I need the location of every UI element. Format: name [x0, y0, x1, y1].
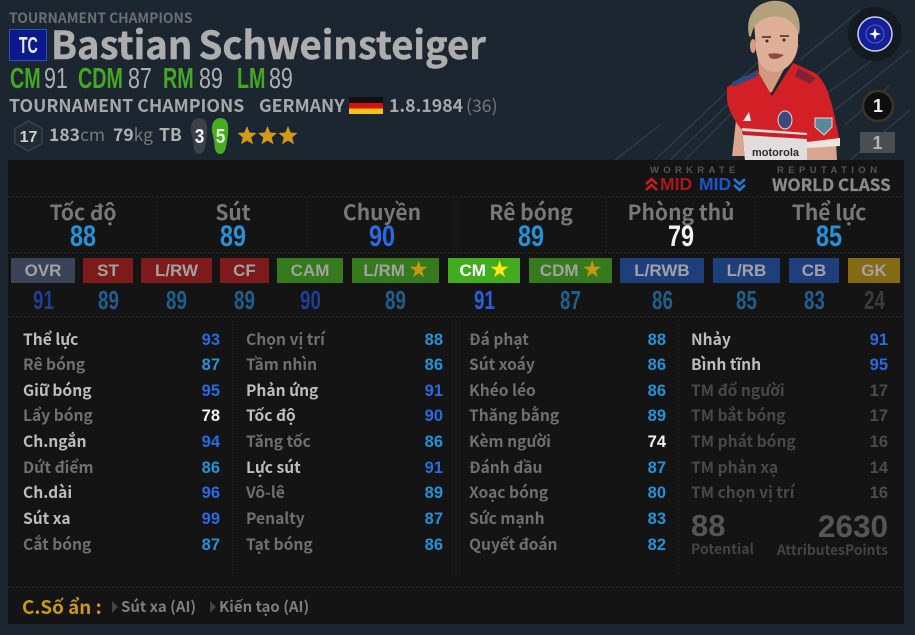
- main panel: [8, 160, 904, 624]
- attributes column 1: Sút xa: [23, 507, 71, 529]
- stat: Sút: 89: [220, 220, 246, 253]
- stat: Tốc độ: Tốc độ: [49, 197, 117, 227]
- position tabs: CAM: [291, 261, 329, 280]
- rank badge: 1: [873, 96, 883, 116]
- stat: Rê bóng: 89: [518, 220, 544, 253]
- position tabs: L/RWB: [634, 261, 690, 280]
- position tabs: L/RW: [155, 261, 198, 280]
- panel dividers: [8, 196, 902, 588]
- player name: Bastian Schweinsteiger: [51, 16, 486, 71]
- height: 183cm: [49, 122, 105, 147]
- stat: Phòng thủ: [627, 197, 734, 253]
- position tabs: 89: [98, 285, 118, 315]
- attributes column 3: Sút xoáy: [469, 353, 535, 375]
- attributes column 3: Đánh đầu: [469, 456, 542, 478]
- position tabs: 90: [300, 285, 320, 315]
- level badge: [860, 132, 895, 153]
- tournament logo: [848, 7, 902, 61]
- position tabs: L/RB: [727, 261, 766, 280]
- attributes column 1: 96: [202, 484, 220, 502]
- background diagonal stripes: [614, 10, 910, 160]
- position tabs: L/RM ★: [363, 259, 428, 281]
- attribute points: 2630: [818, 508, 888, 544]
- position tabs: 91: [33, 285, 53, 315]
- position tabs: 89: [234, 285, 255, 315]
- position tabs: CDM ★: [540, 259, 601, 281]
- workrate: MID: [699, 174, 731, 194]
- position tabs: ST: [97, 261, 119, 280]
- player info row: [14, 118, 298, 154]
- attribute points: [776, 508, 888, 559]
- main stats row: [49, 197, 866, 253]
- right arm: [798, 142, 837, 161]
- potential: [691, 508, 754, 559]
- icon: weak foot: [191, 118, 208, 154]
- left arm: [732, 120, 752, 160]
- attributes column 1: Cắt bóng: [23, 533, 91, 555]
- attributes column 2: Tầm nhìn: [246, 353, 317, 375]
- attributes column 2: Tăng tốc: [246, 430, 311, 452]
- adidas logo: [743, 112, 751, 121]
- body type: TB: [159, 122, 182, 147]
- attributes column 4: 17: [870, 407, 888, 425]
- position tabs: 86: [652, 285, 672, 315]
- attributes column 4: 91: [870, 331, 888, 349]
- icon: weak foot: 3: [195, 125, 204, 147]
- attributes column 1: 99: [202, 510, 220, 528]
- attributes column 2: Tốc độ: [246, 404, 296, 426]
- attributes column 4: Nhảy: [691, 328, 731, 350]
- attributes column 3: Xoạc bóng: [469, 481, 548, 503]
- MLS patch: [815, 118, 832, 135]
- subtitle: TOURNAMENT CHAMPIONS: [9, 7, 192, 27]
- attributes column 3: Kèm người: [469, 430, 551, 452]
- attributes column 3: 86: [648, 356, 666, 374]
- attributes column 2: 88: [425, 331, 443, 349]
- hidden traits: Sút xa (AI): [121, 596, 196, 617]
- badge: TC: [9, 29, 47, 61]
- position tabs: CB: [802, 261, 826, 280]
- position ratings: 89: [269, 63, 293, 95]
- icon: German flag: [349, 97, 383, 114]
- stat: Chuyền: Chuyền: [343, 197, 421, 227]
- attributes column 4: TM bắt bóng: [691, 404, 786, 426]
- position ratings: 87: [128, 63, 152, 95]
- attributes column 2: Tạt bóng: [246, 533, 313, 555]
- sponsor: motorola: [752, 147, 800, 159]
- attributes column 1: [23, 328, 220, 555]
- attributes column 3: Thăng bằng: [469, 404, 559, 426]
- icon: jersey number: 17: [20, 129, 38, 146]
- attributes column 3: 87: [648, 459, 666, 477]
- attributes column 3: 86: [648, 382, 666, 400]
- neck: [757, 50, 790, 96]
- position tabs: 85: [736, 285, 757, 315]
- attributes column 2: 86: [425, 356, 443, 374]
- position tabs: 89: [385, 285, 406, 315]
- attributes column 1: 86: [202, 459, 220, 477]
- attributes column 4: TM phát bóng: [691, 430, 796, 452]
- attributes column 1: Giữ bóng: [23, 379, 92, 401]
- position ratings: CM: [10, 63, 41, 95]
- attributes column 4: 16: [870, 433, 888, 451]
- shirt band: [742, 128, 807, 161]
- rank badge: [862, 90, 894, 122]
- position ratings: RM: [163, 63, 194, 95]
- badge: TC: TC: [18, 32, 38, 58]
- position tabs: 24: [864, 285, 884, 315]
- attributes column 4: Bình tĩnh: [691, 353, 761, 375]
- attributes column 1: 87: [202, 356, 220, 374]
- attributes column 4: TM chọn vị trí: [691, 481, 794, 503]
- stat: Sút: Sút: [215, 197, 251, 227]
- team and nationality line: TOURNAMENT CHAMPIONS: [9, 92, 244, 118]
- attributes column 3: 89: [648, 407, 666, 425]
- stat: Thể lực: Thể lực: [792, 197, 866, 227]
- position tabs: OVR: [25, 261, 61, 280]
- attributes column 1: 94: [202, 433, 220, 451]
- position tabs: 87: [560, 285, 581, 315]
- position tabs: 83: [804, 285, 824, 315]
- attributes column 4: [691, 328, 888, 503]
- position tabs: CM ★: [459, 259, 509, 281]
- icon: attack workrate chevrons: [645, 177, 658, 191]
- attributes column 2: [246, 328, 443, 555]
- hair: [748, 1, 800, 37]
- position ratings: CDM: [78, 63, 123, 95]
- position ratings: 89: [199, 63, 223, 95]
- potential: Potential: [691, 539, 754, 559]
- stat: Tốc độ: 88: [70, 220, 96, 253]
- icon: defence workrate chevrons: [733, 178, 746, 192]
- attributes column 2: 86: [425, 433, 443, 451]
- attributes column 1: 93: [202, 331, 220, 349]
- position ratings: [10, 63, 293, 95]
- position tabs: [11, 258, 900, 315]
- attributes column 3: [469, 328, 666, 555]
- stat: Phòng thủ: 79: [668, 220, 694, 253]
- attributes column 3: 80: [648, 484, 666, 502]
- attributes column 3: Đá phạt: [469, 328, 529, 350]
- stat: Thể lực: 85: [816, 220, 842, 253]
- attributes column 3: 83: [648, 510, 666, 528]
- attribute points: AttributesPoints: [777, 539, 888, 559]
- hidden traits: Kiến tạo (AI): [219, 596, 309, 617]
- attributes column 2: 91: [425, 382, 443, 400]
- player photo: [727, 0, 840, 160]
- attributes column 1: Ch.dài: [23, 481, 72, 503]
- reputation: WORLD CLASS: [772, 171, 891, 196]
- attributes column 1: Ch.ngắn: [23, 430, 86, 452]
- position tabs: 89: [166, 285, 187, 315]
- team and nationality line: GERMANY: [259, 92, 345, 118]
- icon: jersey number: [14, 120, 43, 152]
- stat: Rê bóng: [489, 197, 573, 253]
- attributes column 3: 74: [648, 433, 666, 451]
- stat: Rê bóng: Rê bóng: [489, 197, 573, 227]
- position ratings: LM: [237, 63, 265, 95]
- team and nationality line: [9, 92, 498, 118]
- icon: strong foot: 5: [216, 125, 225, 147]
- attributes column 1: Rê bóng: [23, 353, 85, 375]
- face: [754, 13, 798, 72]
- attributes column 2: Phản ứng: [246, 379, 318, 401]
- position tabs: 91: [474, 285, 494, 315]
- attributes column 1: 78: [202, 407, 220, 425]
- reputation: REPUTATION: [777, 165, 881, 176]
- level badge: 1: [872, 133, 882, 153]
- attributes column 4: 17: [870, 382, 888, 400]
- stat: Chuyền: 90: [369, 220, 395, 253]
- attributes column 2: Vô-lê: [246, 481, 285, 503]
- attributes column 1: Thể lực: [23, 328, 78, 350]
- attributes column 4: 16: [870, 484, 888, 502]
- workrate: [645, 165, 746, 194]
- attributes column 2: Chọn vị trí: [246, 328, 325, 350]
- attributes column 2: 91: [425, 459, 443, 477]
- attributes column 4: 95: [870, 356, 888, 374]
- position tabs: GK: [861, 261, 887, 280]
- attributes column 3: Quyết đoán: [469, 533, 558, 555]
- attributes column 3: 88: [648, 331, 666, 349]
- crest: [778, 111, 792, 129]
- attributes column 2: 89: [425, 484, 443, 502]
- potential: 88: [691, 508, 725, 543]
- stat: Phòng thủ: Phòng thủ: [627, 197, 734, 227]
- attributes column 3: Khéo léo: [469, 379, 536, 401]
- position ratings: 91: [44, 63, 68, 95]
- weight: 79kg: [113, 122, 153, 147]
- workrate: WORKRATE: [650, 165, 740, 176]
- attributes column 1: Lẩy bóng: [23, 404, 93, 426]
- stat: Sút: [215, 197, 251, 253]
- attributes column 4: TM đổ người: [691, 379, 785, 401]
- attributes column 2: 86: [425, 536, 443, 554]
- attributes column 2: 87: [425, 510, 443, 528]
- attributes column 1: Dứt điểm: [23, 456, 93, 478]
- attributes column 3: 82: [648, 536, 666, 554]
- attributes column 1: 87: [202, 536, 220, 554]
- hidden traits: C.Số ẩn :: [22, 593, 102, 620]
- stat: Thể lực: [792, 197, 866, 253]
- attributes column 2: 90: [425, 407, 443, 425]
- attributes column 4: TM phản xạ: [691, 456, 778, 478]
- team and nationality line: (36): [466, 92, 498, 118]
- workrate: MID: [660, 174, 692, 194]
- position tabs: CF: [233, 261, 256, 280]
- icon: skill stars: [238, 126, 298, 144]
- stat: Tốc độ: [49, 197, 117, 253]
- team and nationality line: 1.8.1984: [389, 92, 463, 118]
- attributes column 2: Penalty: [246, 507, 305, 529]
- attributes column 2: Lực sút: [246, 456, 301, 478]
- stat: Chuyền: [343, 197, 421, 253]
- attributes column 3: Sức mạnh: [469, 507, 545, 529]
- shirt: [727, 63, 840, 161]
- attributes column 1: 95: [202, 382, 220, 400]
- attributes column 4: 14: [870, 459, 888, 477]
- icon: strong foot: [212, 118, 228, 154]
- hidden traits: [22, 593, 309, 620]
